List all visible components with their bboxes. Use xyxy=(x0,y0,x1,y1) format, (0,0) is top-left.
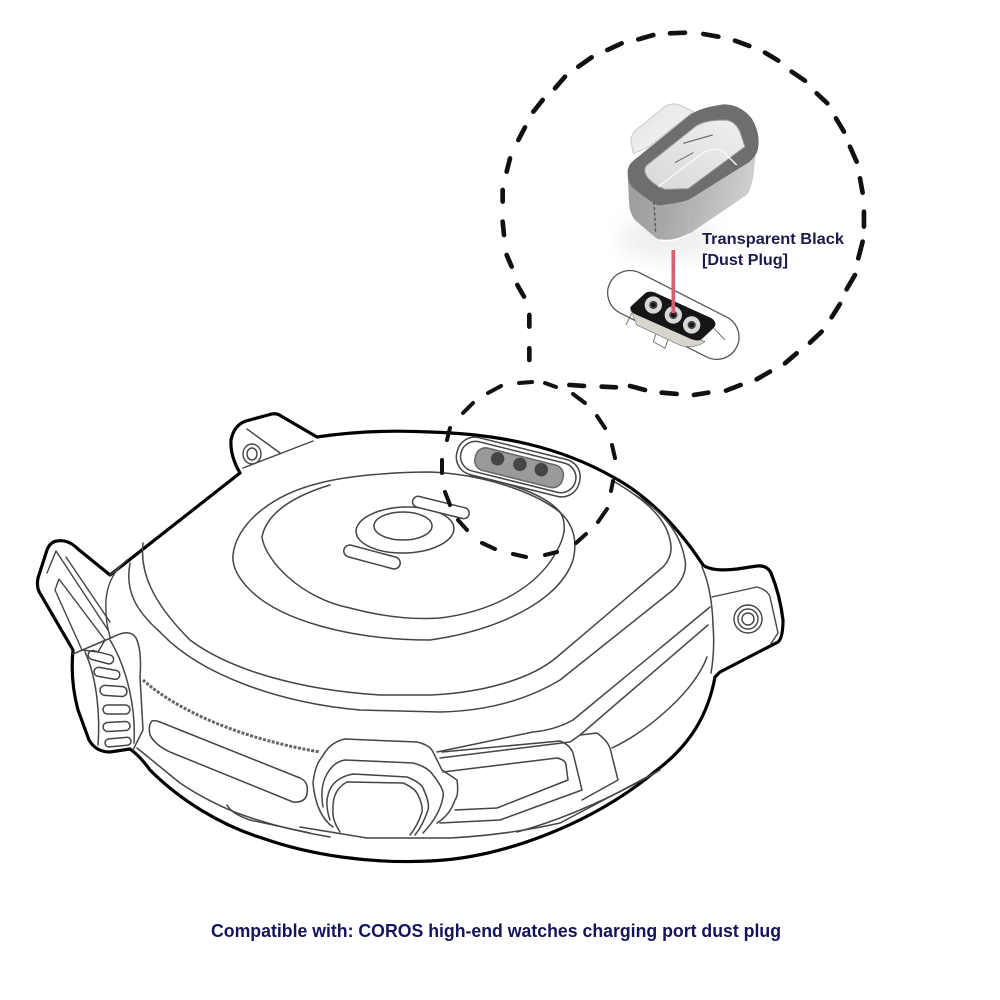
plug tab xyxy=(631,104,693,153)
label: transparent black dust plug: [Dust Plug] xyxy=(702,252,788,269)
plug inner marks xyxy=(654,135,737,241)
charging port close-up xyxy=(600,250,747,367)
dashed callout bubble xyxy=(503,33,864,395)
watch illustration xyxy=(37,414,783,862)
port contact plate xyxy=(630,292,715,340)
crown with ribs xyxy=(73,633,143,750)
contact ring left xyxy=(647,299,660,311)
plug rim xyxy=(628,104,759,205)
label: transparent black dust plug: Transparent Black xyxy=(702,231,844,248)
port outline xyxy=(600,263,747,367)
right side recess xyxy=(300,733,660,838)
plug body xyxy=(628,123,756,241)
dust plug soft shadow xyxy=(618,218,718,258)
plug window xyxy=(645,120,745,189)
contact ring right xyxy=(685,319,698,331)
top dial contours xyxy=(233,472,575,640)
port base lines xyxy=(626,313,725,348)
port shaded wall xyxy=(632,312,705,347)
right lug details xyxy=(712,587,778,645)
dust plug xyxy=(628,104,759,241)
top lug details xyxy=(243,429,313,468)
logo on watch back xyxy=(342,495,470,570)
bezel contours xyxy=(129,482,714,712)
label: transparent black dust plug xyxy=(702,231,844,269)
dashed magnifier circle xyxy=(442,382,615,557)
watch outer outline xyxy=(37,414,783,862)
contact ring centre xyxy=(667,309,680,321)
caption: Compatible with: COROS high-end watches charging port dust plug xyxy=(211,921,781,941)
charging port on watch xyxy=(453,433,584,501)
body band lines xyxy=(143,607,710,758)
left side recess xyxy=(137,721,330,837)
left lug details xyxy=(47,551,127,652)
red guide line xyxy=(668,250,679,313)
centre button xyxy=(313,739,458,835)
